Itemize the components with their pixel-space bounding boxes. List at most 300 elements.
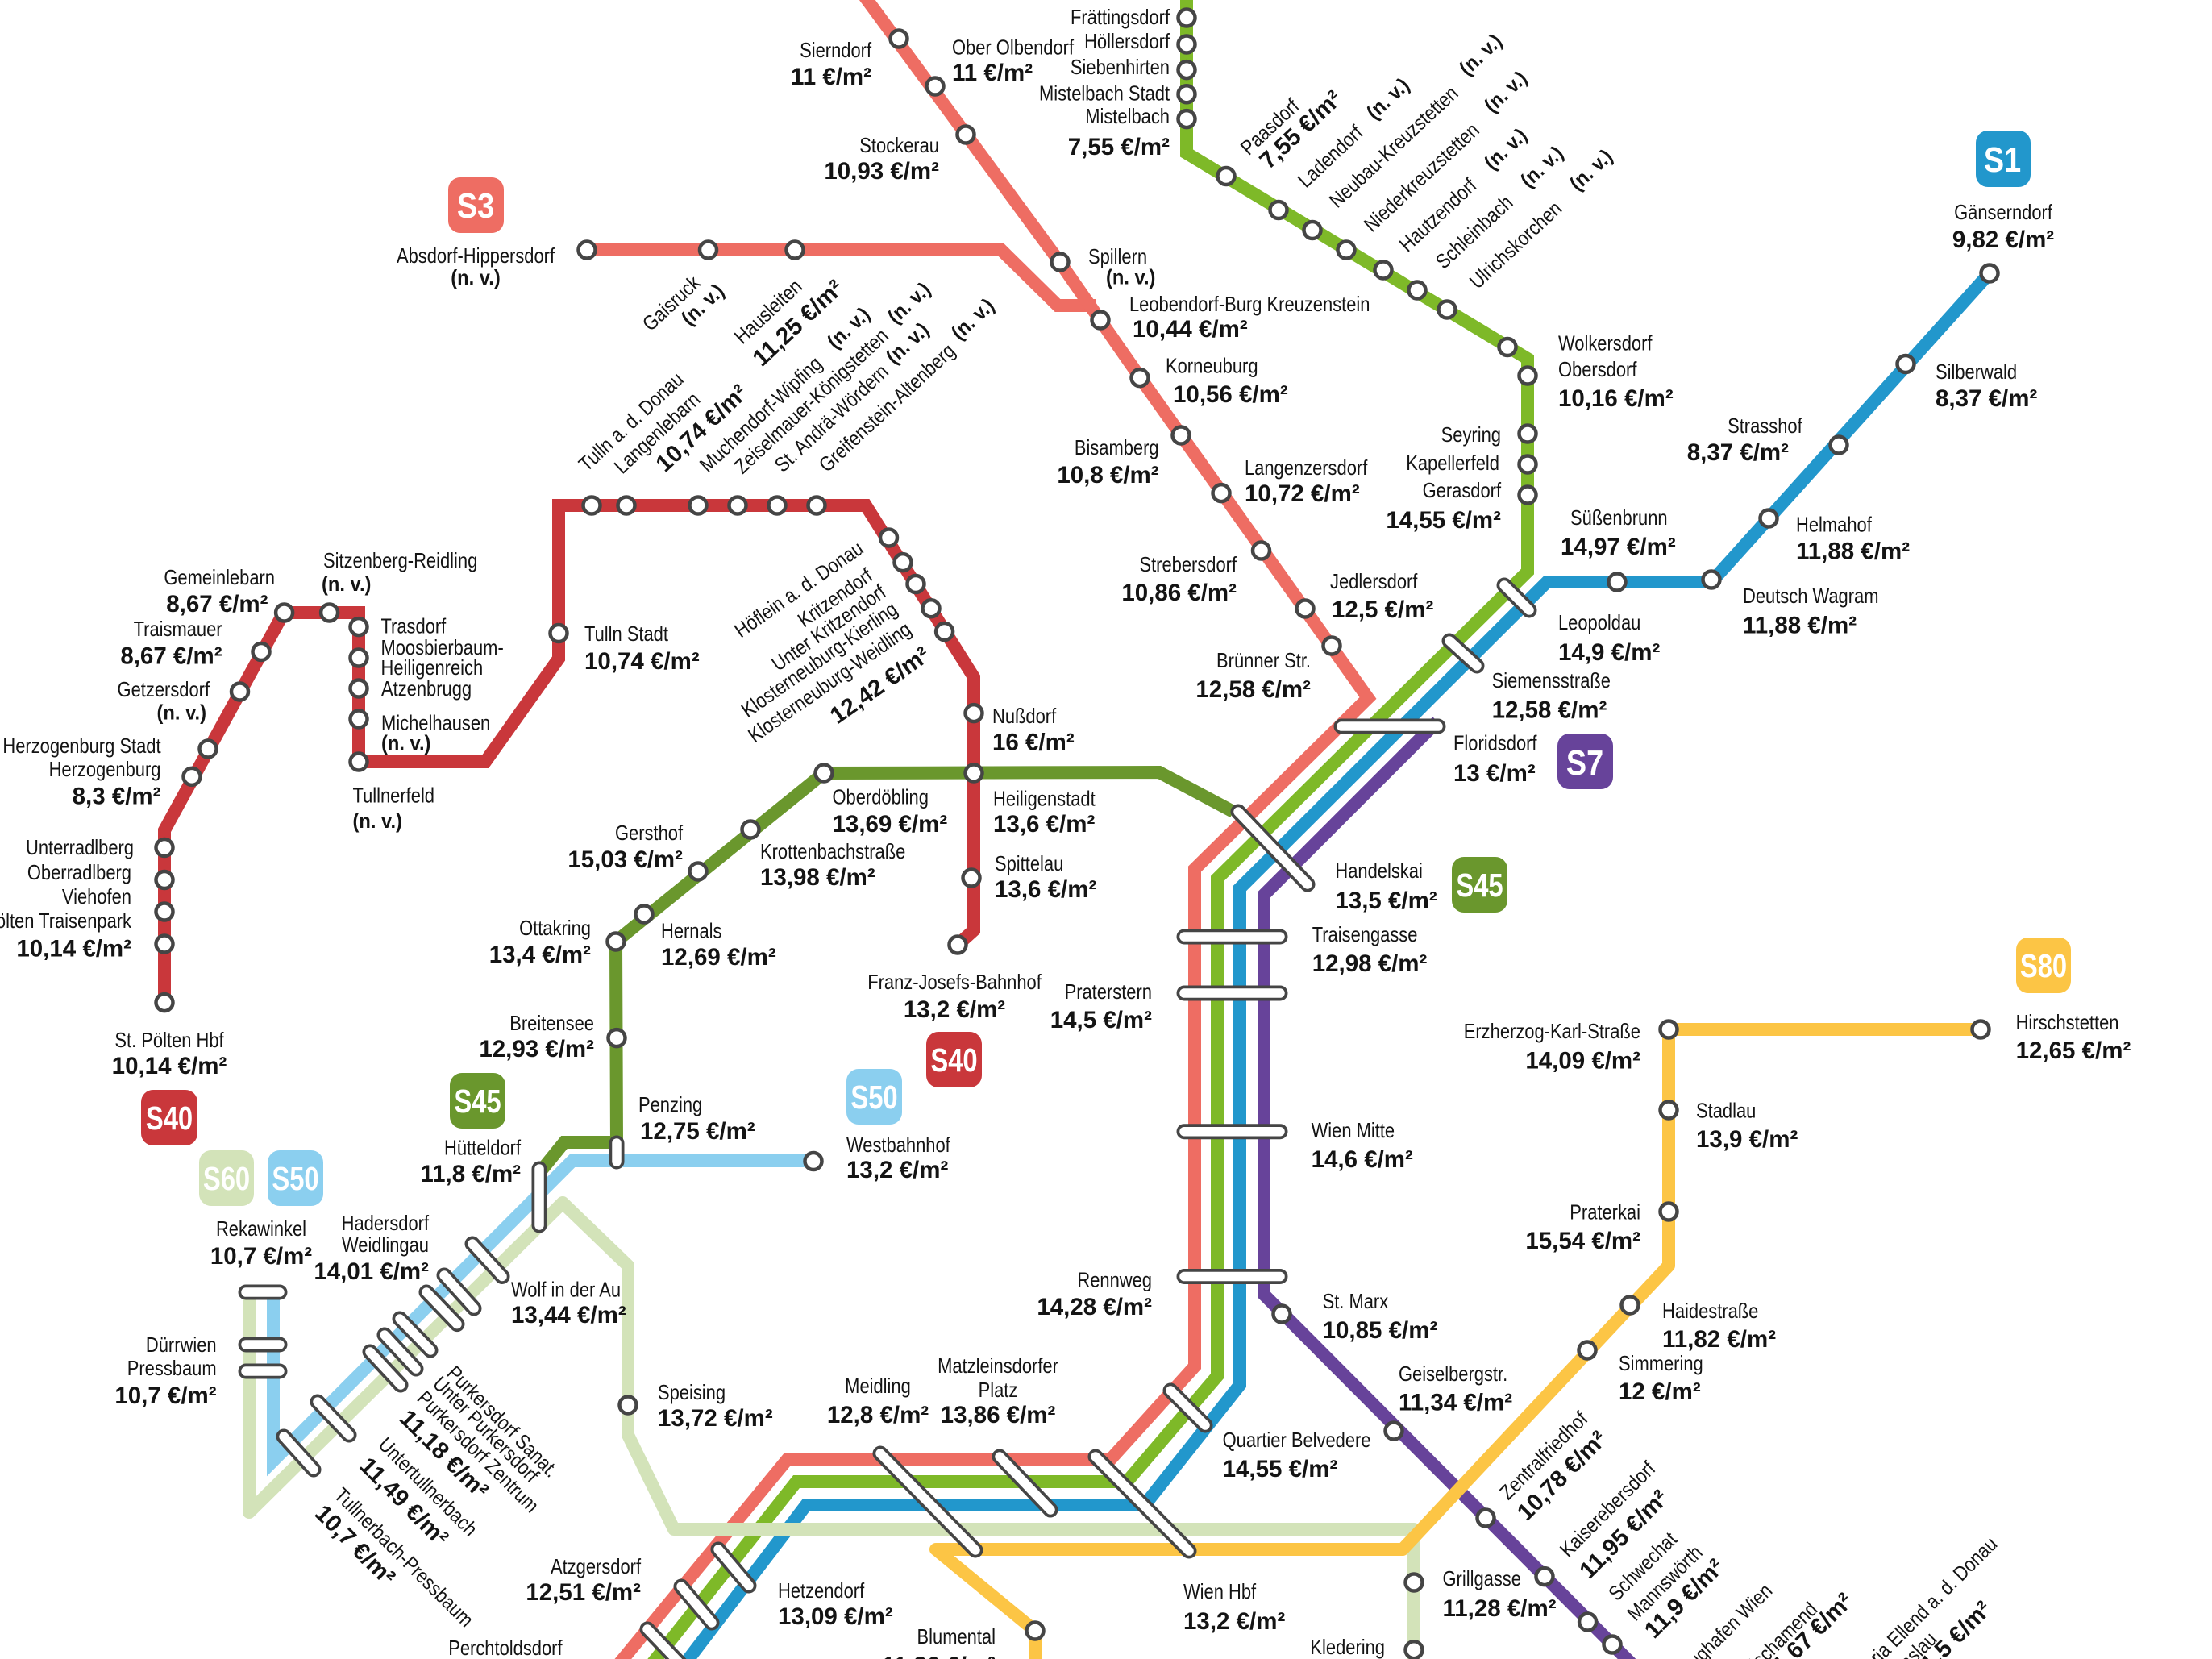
- label: Gersthof: [568, 821, 683, 873]
- label: Matzleinsdorfer Platz: Matzleinsdorfer: [938, 1354, 1058, 1378]
- label: Getzersdorf: Getzersdorf: [118, 678, 210, 701]
- label: Schleinbach: Schleinbach: [1432, 191, 1518, 273]
- line S40: [156, 497, 982, 1011]
- label: Spillern: (n. v.): [1106, 267, 1155, 289]
- label: Silberwald: [1936, 360, 2037, 412]
- line S7: [1264, 721, 1636, 1659]
- label: Hautzendorf: [1395, 124, 1532, 256]
- label: Zeiselmauer-Königstetten: (n. v.): [884, 278, 935, 329]
- badge S40 left: S40: [146, 1099, 193, 1137]
- label: Zeiselmauer-Königstetten: Zeiselmauer-Königstetten: [730, 324, 893, 479]
- label: Schwechat and Mannswörth: [1604, 1528, 1729, 1644]
- label: Penzing: Penzing: [638, 1093, 702, 1116]
- label: Ulrichskorchen: (n. v.): [1565, 145, 1617, 196]
- label: Tulln a. d. Donau and Langenlebarn: [575, 368, 753, 479]
- label: Schwechat and Mannswörth: Mannswörth: [1623, 1541, 1707, 1626]
- label: Hernals: [661, 920, 776, 971]
- badge S45 left: S45: [454, 1082, 501, 1120]
- label: Speising: 13,72 €/m²: [658, 1405, 773, 1432]
- interchange bars: [246, 585, 1529, 1659]
- label: Spittelau: Spittelau: [995, 852, 1063, 875]
- label: Simmering: 12 €/m²: [1619, 1378, 1701, 1405]
- label: Meidling: Meidling: [845, 1374, 911, 1398]
- label: Brünner Str.: 12,58 €/m²: [1195, 676, 1311, 703]
- label: Ulrichskorchen: Ulrichskorchen: [1466, 197, 1566, 293]
- label: Mistelbach group: [1039, 6, 1170, 160]
- label: Wolkersdorf and Obersdorf: Obersdorf: [1558, 358, 1637, 381]
- label: Herzogenburg: 8,3 €/m²: [73, 784, 161, 809]
- badge S50 left: S50: [272, 1159, 319, 1197]
- label: Wien Hbf: Wien Hbf: [1183, 1580, 1256, 1603]
- label: Meidling: [827, 1374, 929, 1428]
- badge S60: [199, 1150, 254, 1206]
- label: Leobendorf-Burg Kreuzenstein: 10,44 €/m²: [1133, 316, 1248, 343]
- label: Hirschstetten: 12,65 €/m²: [2016, 1037, 2131, 1064]
- label: Niederkreuzstetten: Niederkreuzstetten: [1360, 118, 1484, 237]
- badge S80: S80: [2020, 946, 2067, 984]
- line S1: [681, 264, 1998, 1659]
- label: Strasshof: 8,37 €/m²: [1687, 439, 1789, 466]
- label: Höflein to Klosterneuburg-Weidling: Klosterneuburg-Kierling: [738, 597, 902, 722]
- label: Gemeinlebarn: 8,67 €/m²: [166, 591, 268, 617]
- label: Muchendorf-Wipfing: Muchendorf-Wipfing: [696, 352, 827, 477]
- label: Tulln a. d. Donau and Langenlebarn: 10,74 €/m²: [651, 380, 753, 477]
- label: Höflein to Klosterneuburg-Weidling: Unter Kritzendorf: [767, 580, 891, 676]
- label: Atzgersdorf: 12,51 €/m²: [526, 1579, 641, 1606]
- label: Matzleinsdorfer Platz: 13,86 €/m²: [941, 1402, 1056, 1428]
- label: Siemensstraße: 12,58 €/m²: [1492, 696, 1607, 724]
- label: Brünner Str.: Brünner Str.: [1216, 649, 1311, 672]
- label: Paasdorf: 7,55 €/m²: [1254, 85, 1347, 174]
- label: Oberdöbling: [832, 786, 947, 838]
- badge S50 centre: S50: [850, 1078, 898, 1116]
- label: Wien Mitte: 14,6 €/m²: [1312, 1146, 1413, 1173]
- label: Handelskai: 13,5 €/m²: [1335, 888, 1437, 914]
- label: Helmahof: Helmahof: [1796, 514, 1872, 537]
- label: Korneuburg: [1166, 355, 1288, 408]
- badge S40 left: [141, 1090, 198, 1146]
- label: Gemeinlebarn: Gemeinlebarn: [164, 566, 275, 589]
- label: St. Andrä-Wördern: (n. v.): [882, 318, 933, 369]
- label: Unterradlberg to Traisenpark: [0, 836, 134, 963]
- label: Geiselbergstr.: 11,34 €/m²: [1399, 1390, 1512, 1416]
- label: Simmering: Simmering: [1619, 1352, 1703, 1375]
- label: Speising: [658, 1381, 773, 1432]
- label: Atzgersdorf: [526, 1555, 641, 1606]
- label: Ober Olbendorf: Ober Olbendorf: [952, 36, 1074, 60]
- label: Franz-Josefs-Bahnhof: 13,2 €/m²: [904, 996, 1005, 1023]
- label: Mistelbach group: Höllersdorf: [1084, 30, 1170, 53]
- label: Dürrwien and Pressbaum: 10,7 €/m²: [114, 1382, 217, 1409]
- label: Wien Mitte: [1312, 1119, 1413, 1173]
- label: Geiselbergstr.: Geiselbergstr.: [1399, 1362, 1507, 1386]
- label: Langenzersdorf: [1245, 456, 1368, 507]
- label: Herzogenburg: Herzogenburg: [49, 758, 161, 781]
- label: Ober Olbendorf: [952, 36, 1074, 86]
- badge S40 centre: S40: [930, 1041, 978, 1079]
- label: Zentralfriedhof: 10,78 €/m²: [1512, 1426, 1612, 1526]
- label: Grillgasse: 11,28 €/m²: [1443, 1595, 1557, 1622]
- label: Hirschstetten: [2016, 1011, 2131, 1064]
- label: Quartier Belvedere: [1223, 1428, 1371, 1482]
- label: Sierndorf: 11 €/m²: [791, 64, 871, 90]
- label: Trasdorf: Michelhausen: [381, 712, 490, 735]
- label: Hernals: 12,69 €/m²: [661, 944, 776, 971]
- label: Strebersdorf: [1121, 553, 1237, 606]
- label: Breitensee: [479, 1012, 594, 1062]
- label: Blumental: [882, 1625, 996, 1659]
- label: Rennweg: 14,28 €/m²: [1037, 1294, 1152, 1320]
- label: Purkersdorf group: Purkersdorf Sanat.: [442, 1362, 563, 1482]
- label: Strebersdorf: Strebersdorf: [1139, 553, 1237, 576]
- label: Zeiselmauer-Königstetten: [730, 278, 935, 479]
- label: Höflein to Klosterneuburg-Weidling: 12,42 €/m²: [825, 642, 935, 730]
- label: Seyring, Kapellerfeld, Gerasdorf: 14,55 €/m²: [1386, 507, 1501, 534]
- label: Sierndorf: [791, 39, 871, 90]
- label: Westbahnhof: Westbahnhof: [846, 1133, 950, 1157]
- label: Dürrwien and Pressbaum: [114, 1333, 217, 1409]
- label: Hirschstetten: Hirschstetten: [2016, 1011, 2118, 1034]
- label: Jedlersdorf: 12,5 €/m²: [1332, 597, 1433, 623]
- label: Praterkai: Praterkai: [1570, 1201, 1640, 1224]
- label: Sitzenberg-Reidling: (n. v.): [322, 573, 371, 596]
- line S45: [539, 764, 1233, 1173]
- label: St. Andrä-Wördern: [771, 318, 933, 477]
- label: Traisengasse: 12,98 €/m²: [1312, 950, 1428, 977]
- label: Rennweg: [1037, 1269, 1152, 1320]
- label: Höflein to Klosterneuburg-Weidling: Klosterneuburg-Weidling: [744, 617, 916, 747]
- label: Praterkai: [1525, 1201, 1640, 1254]
- label: Ladendorf: (n. v.): [1362, 74, 1414, 124]
- label: Wien Hbf: [1183, 1580, 1285, 1635]
- label: Silberwald: Silberwald: [1936, 360, 2017, 384]
- label: Penzing: [638, 1093, 755, 1145]
- label: Stadlau: [1696, 1100, 1798, 1153]
- label: Praterstern: Praterstern: [1065, 980, 1152, 1004]
- label: Absdorf-Hippersdorf: [397, 244, 555, 289]
- label: Unterradlberg to Traisenpark: 10,14 €/m²: [16, 935, 131, 963]
- label: Hadersdorf and Weidlingau: [314, 1212, 429, 1285]
- label: Traismauer: 8,67 €/m²: [120, 643, 222, 670]
- label: Krottenbachstraße: 13,98 €/m²: [760, 864, 875, 891]
- label: Franz-Josefs-Bahnhof: [867, 971, 1042, 1023]
- label: Tulln a. d. Donau and Langenlebarn: Tulln a. d. Donau: [575, 368, 688, 476]
- label: Strebersdorf: 10,86 €/m²: [1121, 580, 1237, 606]
- badge S7: [1557, 734, 1613, 789]
- label: Krottenbachstraße: Krottenbachstraße: [760, 840, 905, 863]
- label: Leopoldau: Leopoldau: [1558, 611, 1640, 634]
- label: Wolkersdorf and Obersdorf: [1558, 332, 1674, 412]
- label: Deutsch Wagram: Deutsch Wagram: [1743, 584, 1878, 608]
- label: Niederkreuzstetten: (n. v.): [1480, 67, 1532, 118]
- label: Untertullnerbach: 11,49 €/m²: [355, 1453, 454, 1552]
- label: Gersthof: 15,03 €/m²: [568, 846, 683, 873]
- label: Gersthof: Gersthof: [615, 821, 683, 845]
- label: Tulln Stadt: [584, 622, 700, 675]
- label: Westbahnhof: [846, 1133, 950, 1183]
- label: St. Andrä-Wördern: St. Andrä-Wördern: [771, 360, 893, 477]
- label: Seyring, Kapellerfeld, Gerasdorf: Seyring: [1441, 423, 1501, 447]
- label: Erzherzog-Karl-Straße: 14,09 €/m²: [1525, 1048, 1640, 1075]
- label: Erzherzog-Karl-Straße: Erzherzog-Karl-Straße: [1464, 1020, 1640, 1043]
- label: Deutsch Wagram: 11,88 €/m²: [1743, 613, 1856, 638]
- label: Hadersdorf and Weidlingau: Hadersdorf: [342, 1212, 429, 1235]
- line S50: [273, 1153, 822, 1461]
- label: Schwechat and Mannswörth: 11,9 €/m²: [1640, 1553, 1729, 1644]
- label: Neubau-Kreuzstetten: Neubau-Kreuzstetten: [1325, 81, 1463, 213]
- label: Breitensee: 12,93 €/m²: [479, 1036, 594, 1062]
- label: Sitzenberg-Reidling: [322, 549, 477, 596]
- label: Hetzendorf: [778, 1579, 893, 1630]
- line S60: [249, 1203, 1422, 1659]
- label: Quartier Belvedere: 14,55 €/m²: [1223, 1456, 1337, 1482]
- label: Tullnerbach-Pressbaum: Tullnerbach-Pressbaum: [329, 1483, 478, 1632]
- label: Mistelbach group: Frättingsdorf: [1071, 6, 1170, 29]
- label: Praterstern: 14,5 €/m²: [1050, 1007, 1152, 1033]
- line S2: [648, 0, 1536, 1659]
- label: Getzersdorf: [118, 678, 210, 725]
- label: Unterradlberg to Traisenpark: Oberradlberg: [27, 861, 131, 884]
- label: Speising: Speising: [658, 1381, 726, 1404]
- label: Wolkersdorf and Obersdorf: Wolkersdorf: [1558, 332, 1653, 356]
- label: Stockerau: Stockerau: [859, 134, 939, 157]
- label: Untertullnerbach: Untertullnerbach: [373, 1433, 482, 1541]
- label: Seyring, Kapellerfeld, Gerasdorf: [1386, 423, 1501, 534]
- label: Süßenbrunn: Süßenbrunn: [1570, 506, 1668, 530]
- label: Langenzersdorf: Langenzersdorf: [1245, 456, 1368, 480]
- label: Wien Hbf: 13,2 €/m²: [1183, 1608, 1285, 1635]
- label: Getzersdorf: (n. v.): [157, 702, 206, 725]
- label: Praterstern: [1050, 980, 1152, 1033]
- label: Oberdöbling: Oberdöbling: [833, 786, 929, 809]
- label: Zentralfriedhof: Zentralfriedhof: [1495, 1407, 1593, 1504]
- label: Oberdöbling: 13,69 €/m²: [832, 811, 947, 838]
- label: Hausleiten: Hausleiten: [730, 275, 807, 349]
- label: Breitensee: Breitensee: [509, 1012, 594, 1035]
- label: Rennweg: Rennweg: [1077, 1269, 1152, 1292]
- label: Gaisruck: (n. v.): [677, 280, 729, 331]
- label: Süßenbrunn: 14,97 €/m²: [1561, 534, 1676, 560]
- label: Heiligenstadt: Heiligenstadt: [993, 788, 1096, 811]
- label: Stadlau: Stadlau: [1696, 1100, 1756, 1123]
- label: Penzing: 12,75 €/m²: [640, 1118, 755, 1145]
- label: Dürrwien and Pressbaum: Dürrwien: [146, 1333, 217, 1357]
- label: Erzherzog-Karl-Straße: [1464, 1020, 1640, 1075]
- label: Wolf in der Au: 13,44 €/m²: [511, 1302, 626, 1328]
- label: Höflein to Klosterneuburg-Weidling: [730, 537, 935, 747]
- label: Greifenstein-Altenberg: [815, 294, 999, 477]
- label: Haidestraße: 11,82 €/m²: [1662, 1326, 1776, 1353]
- label: Hernals: Hernals: [661, 920, 722, 943]
- label: Wolf in der Au: Wolf in der Au: [511, 1279, 621, 1302]
- label: Dürrwien and Pressbaum: Pressbaum: [127, 1357, 217, 1380]
- label: Stockerau: 10,93 €/m²: [824, 158, 939, 185]
- label: Praterkai: 15,54 €/m²: [1525, 1228, 1640, 1254]
- label: Spittelau: [995, 852, 1096, 903]
- label: Jedlersdorf: Jedlersdorf: [1330, 570, 1418, 593]
- label: Floridsdorf: Floridsdorf: [1453, 732, 1537, 755]
- label: Seyring, Kapellerfeld, Gerasdorf: Gerasdorf: [1423, 479, 1501, 502]
- label: Krottenbachstraße: [760, 840, 905, 891]
- label: Neubau-Kreuzstetten: (n. v.): [1455, 30, 1507, 81]
- label: Ober Olbendorf: 11 €/m²: [952, 60, 1033, 86]
- label: Greifenstein-Altenberg: (n. v.): [947, 294, 999, 345]
- badge S3: [448, 177, 504, 233]
- label: Kledering: Kledering: [1310, 1636, 1385, 1659]
- label: Leobendorf-Burg Kreuzenstein: Leobendorf-Burg Kreuzenstein: [1129, 293, 1370, 316]
- label: Rekawinkel: 10,7 €/m²: [210, 1243, 312, 1270]
- label: Hütteldorf: [420, 1137, 521, 1187]
- label: Korneuburg: Korneuburg: [1166, 355, 1258, 378]
- label: Seyring, Kapellerfeld, Gerasdorf: Kapellerfeld: [1406, 451, 1499, 475]
- label: Muchendorf-Wipfing: [696, 303, 875, 477]
- label: Matzleinsdorfer Platz: Platz: [979, 1378, 1017, 1402]
- badge S45 right: [1452, 857, 1507, 913]
- label: Gänserndorf: Gänserndorf: [1954, 201, 2052, 224]
- label: Haidestraße: Haidestraße: [1662, 1299, 1758, 1323]
- label: Höflein to Klosterneuburg-Weidling: Höflein a. d. Donau: [730, 537, 867, 642]
- label: Strasshof: [1687, 414, 1802, 466]
- label: Ottakring: Ottakring: [519, 917, 591, 940]
- label: Mistelbach group: Mistelbach: [1085, 105, 1170, 128]
- label: Bisamberg: 10,8 €/m²: [1057, 462, 1159, 489]
- badge S7: S7: [1566, 742, 1603, 783]
- label: Floridsdorf: [1453, 732, 1537, 787]
- label: Ladendorf: Ladendorf: [1294, 121, 1368, 193]
- label: Sierndorf: Sierndorf: [800, 39, 871, 62]
- label: Ottakring: 13,4 €/m²: [489, 942, 591, 968]
- label: Hetzendorf: Hetzendorf: [778, 1579, 865, 1603]
- label: Mistelbach group: 7,55 €/m²: [1068, 134, 1170, 160]
- label: Leopoldau: 14,9 €/m²: [1558, 639, 1660, 666]
- label: Jedlersdorf: [1330, 570, 1433, 623]
- label: Korneuburg: 10,56 €/m²: [1173, 381, 1288, 408]
- label: Mistelbach group: Mistelbach Stadt: [1039, 82, 1170, 106]
- line S3: [579, 0, 1368, 1659]
- label: Hütteldorf: 11,8 €/m²: [420, 1161, 521, 1187]
- label: Ottakring: [489, 917, 591, 968]
- badge S80: [2016, 938, 2071, 993]
- label: Kaiserebersdorf: Kaiserebersdorf: [1556, 1457, 1661, 1562]
- label: Silberwald: 8,37 €/m²: [1936, 385, 2037, 412]
- label: Handelskai: Handelskai: [1335, 859, 1423, 883]
- badge S60: S60: [203, 1159, 250, 1197]
- label: Wolf in der Au: [511, 1279, 626, 1328]
- badge S3: S3: [457, 185, 494, 226]
- badge S50 centre: [846, 1069, 902, 1125]
- label: Heiligenstadt: [993, 788, 1096, 838]
- label: Helmahof: [1796, 514, 1910, 565]
- label: Meidling: 12,8 €/m²: [827, 1402, 929, 1428]
- label: Trasdorf: Atzenbrugg: [381, 677, 472, 701]
- label: Gaisruck: Gaisruck: [638, 271, 705, 336]
- label: Greifenstein-Altenberg: Greifenstein-Altenberg: [815, 339, 960, 477]
- label: Trasdorf: [380, 615, 504, 755]
- label: Grillgasse: [1442, 1567, 1557, 1622]
- label: Mistelbach group: Siebenhirten: [1071, 56, 1170, 79]
- label: Absdorf-Hippersdorf: (n. v.): [451, 267, 501, 289]
- label: St. Pölten Hbf: 10,14 €/m²: [112, 1053, 227, 1079]
- label: Sitzenberg-Reidling: Sitzenberg-Reidling: [323, 549, 477, 572]
- label: Nußdorf: [992, 705, 1075, 756]
- label: Spillern: [1088, 245, 1155, 289]
- label: Tulln Stadt: 10,74 €/m²: [584, 648, 700, 675]
- label: Spittelau: 13,6 €/m²: [995, 876, 1096, 903]
- label: Siemensstraße: [1492, 669, 1611, 724]
- label: Nußdorf: Nußdorf: [992, 705, 1057, 728]
- label: Wien Mitte: Wien Mitte: [1312, 1119, 1395, 1142]
- badge S1: [1976, 131, 2031, 187]
- label: Purkersdorf group: 11,18 €/m²: [394, 1405, 493, 1504]
- label: Siemensstraße: Siemensstraße: [1492, 669, 1611, 692]
- label: Ladendorf: [1294, 74, 1414, 193]
- label: Bisamberg: Bisamberg: [1075, 436, 1159, 459]
- label: Rekawinkel: [210, 1217, 312, 1270]
- label: Traisengasse: Traisengasse: [1312, 923, 1417, 946]
- label: Tulln Stadt: Tulln Stadt: [584, 622, 668, 646]
- label: Stadlau: 13,9 €/m²: [1696, 1126, 1798, 1153]
- label: Gemeinlebarn: [164, 566, 275, 617]
- label: Traismauer: Traismauer: [134, 617, 222, 641]
- label: Nußdorf: 16 €/m²: [992, 730, 1075, 756]
- label: Schleinbach: (n. v.): [1516, 142, 1568, 193]
- label: Hetzendorf: 13,09 €/m²: [778, 1603, 893, 1630]
- label: Deutsch Wagram: [1743, 584, 1878, 638]
- label: Handelskai: [1335, 859, 1437, 914]
- label: St. Marx: [1323, 1290, 1437, 1344]
- label: Süßenbrunn: [1561, 506, 1676, 560]
- label: Bisamberg: [1057, 436, 1159, 489]
- label: Leobendorf-Burg Kreuzenstein: [1129, 293, 1370, 343]
- label: Heiligenstadt: 13,6 €/m²: [993, 811, 1095, 838]
- badge S45 right: S45: [1456, 866, 1503, 904]
- badge S40 centre: [926, 1032, 982, 1087]
- label: Franz-Josefs-Bahnhof: Franz-Josefs-Bahnhof: [867, 971, 1042, 994]
- label: Purkersdorf group: Purkersdorf Zentrum: [412, 1387, 543, 1518]
- label: Leopoldau: [1558, 611, 1660, 666]
- label: Hadersdorf and Weidlingau: 14,01 €/m²: [314, 1258, 429, 1285]
- label: Neubau-Kreuzstetten: [1325, 30, 1507, 213]
- label: Helmahof: 11,88 €/m²: [1796, 538, 1910, 565]
- badge S45 left: [450, 1073, 505, 1129]
- label: Tullnerfeld: [352, 784, 434, 833]
- label: Geiselbergstr.: [1399, 1362, 1512, 1416]
- label: Unterradlberg to Traisenpark: Unterradlberg: [26, 836, 134, 859]
- label: Hautzendorf: Hautzendorf: [1395, 174, 1482, 256]
- label: Grillgasse: Grillgasse: [1442, 1567, 1521, 1590]
- label: Haidestraße: [1662, 1299, 1776, 1353]
- label: Traisengasse: [1312, 923, 1428, 977]
- label: Wolkersdorf and Obersdorf: 10,16 €/m²: [1558, 385, 1674, 412]
- label: St. Marx: 10,85 €/m²: [1323, 1317, 1437, 1344]
- label: Langenzersdorf: 10,72 €/m²: [1245, 480, 1360, 507]
- label: Hausleiten: 11,25 €/m²: [747, 275, 849, 372]
- label: Westbahnhof: 13,2 €/m²: [846, 1157, 948, 1183]
- label: Purkersdorf group: Unter Purkersdorf: [428, 1372, 543, 1487]
- label: Hautzendorf: (n. v.): [1480, 124, 1532, 175]
- label: Simmering: [1619, 1352, 1703, 1405]
- label: Trasdorf: Trasdorf: [380, 615, 447, 638]
- label: Tullnerfeld: Tullnerfeld: [352, 784, 434, 808]
- label: Paasdorf: Paasdorf: [1237, 94, 1304, 160]
- badge S1: S1: [1984, 139, 2021, 180]
- label: St. Pölten Hbf: [112, 1029, 227, 1079]
- label: Ulrichskorchen: [1466, 145, 1617, 293]
- label: Tullnerfeld: (n. v.): [353, 810, 402, 833]
- label: St. Marx: St. Marx: [1323, 1290, 1388, 1313]
- label: Trasdorf: Moosbierbaum-: [380, 636, 504, 659]
- label: Quartier Belvedere: Quartier Belvedere: [1223, 1428, 1371, 1452]
